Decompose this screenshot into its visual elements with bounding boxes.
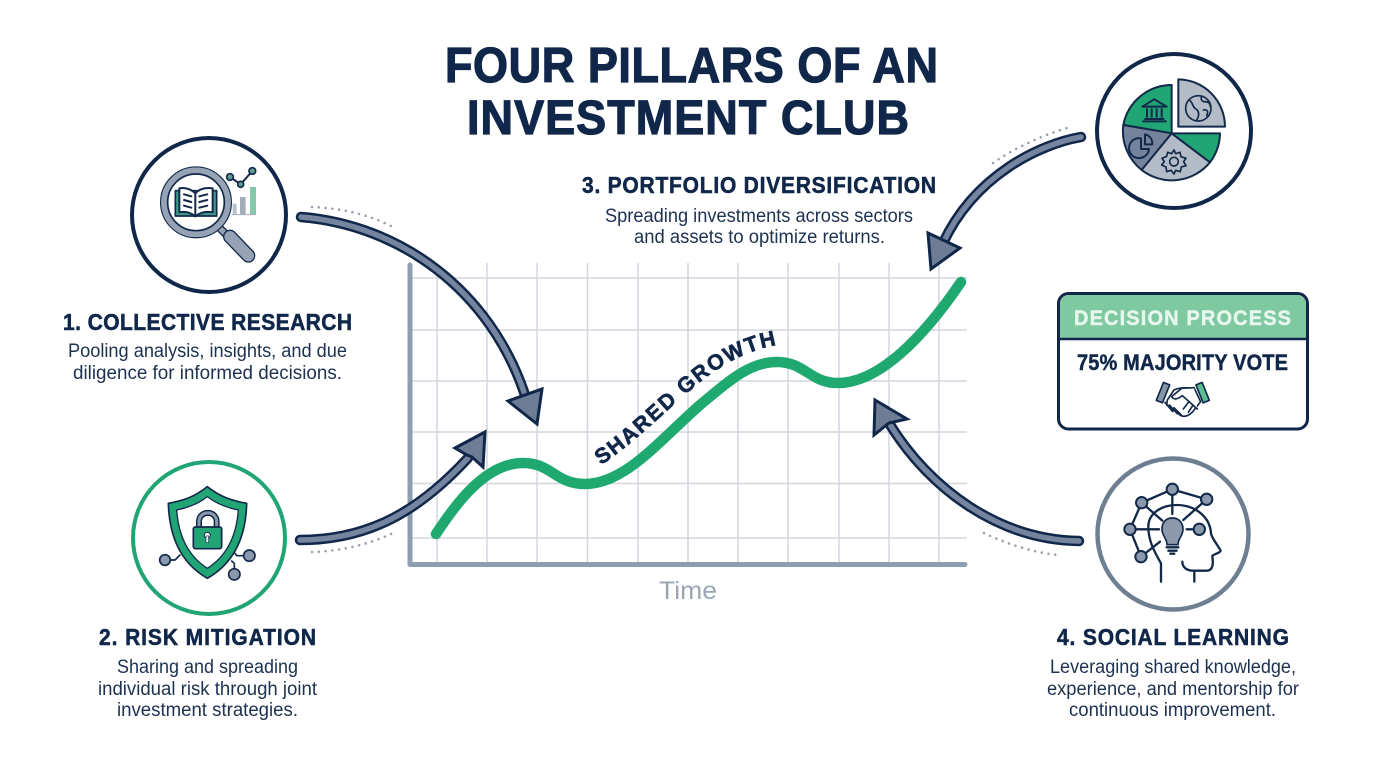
text: portfolio diversification: 3. PORTFOLIO DIVERSIFICATION — [582, 172, 936, 198]
text: portfolio diversification: and assets to optimize returns. — [634, 227, 885, 248]
text: social learning — [1047, 624, 1300, 721]
title — [445, 38, 938, 144]
text: social learning: continuous improvement. — [1069, 700, 1276, 721]
icon: shield with lock — [133, 462, 285, 614]
icon: head with lightbulb network — [1098, 458, 1248, 610]
text: social learning: experience, and mentorship for — [1047, 679, 1300, 700]
text: risk mitigation: 2. RISK MITIGATION — [99, 624, 316, 650]
growth curve — [436, 282, 961, 534]
text: social learning: 4. SOCIAL LEARNING — [1057, 624, 1289, 650]
icon: handshake — [1156, 382, 1209, 416]
icon: diversified pie chart — [1097, 54, 1251, 208]
text: portfolio diversification: Spreading investments across sectors — [605, 206, 913, 227]
dotted accents — [312, 128, 1067, 555]
text: collective research: diligence for informed decisions. — [73, 363, 342, 384]
chart axes — [410, 265, 965, 564]
text: collective research: Pooling analysis, insights, and due — [68, 341, 347, 362]
arrow 4: learning to chart — [874, 400, 1079, 541]
arrow 2: risk to chart — [300, 432, 485, 540]
callout: decision process: 75% MAJORITY VOTE — [1077, 351, 1288, 375]
callout: decision process — [1058, 294, 1308, 429]
title: INVESTMENT CLUB — [467, 90, 909, 144]
text: collective research — [63, 309, 352, 384]
text: risk mitigation — [98, 624, 318, 721]
text: collective research: 1. COLLECTIVE RESEARCH — [63, 309, 352, 335]
text: portfolio diversification — [582, 172, 936, 248]
curve label: SHARED GROWTH — [594, 330, 776, 464]
axis label: Time — [659, 577, 717, 605]
icon: magnifier over book — [132, 138, 286, 292]
text: risk mitigation: investment strategies. — [117, 700, 298, 721]
text: risk mitigation: individual risk through joint — [98, 679, 318, 700]
text: social learning: Leveraging shared knowledge, — [1050, 657, 1296, 678]
arrow 1: research to chart — [301, 217, 542, 424]
title: FOUR PILLARS OF AN — [445, 38, 938, 94]
arrow 3: diversification to chart — [928, 137, 1081, 269]
text: risk mitigation: Sharing and spreading — [117, 657, 298, 678]
callout: decision process: DECISION PROCESS — [1074, 306, 1291, 330]
callout header — [1060, 295, 1306, 339]
line chart: shared growth — [408, 262, 968, 605]
